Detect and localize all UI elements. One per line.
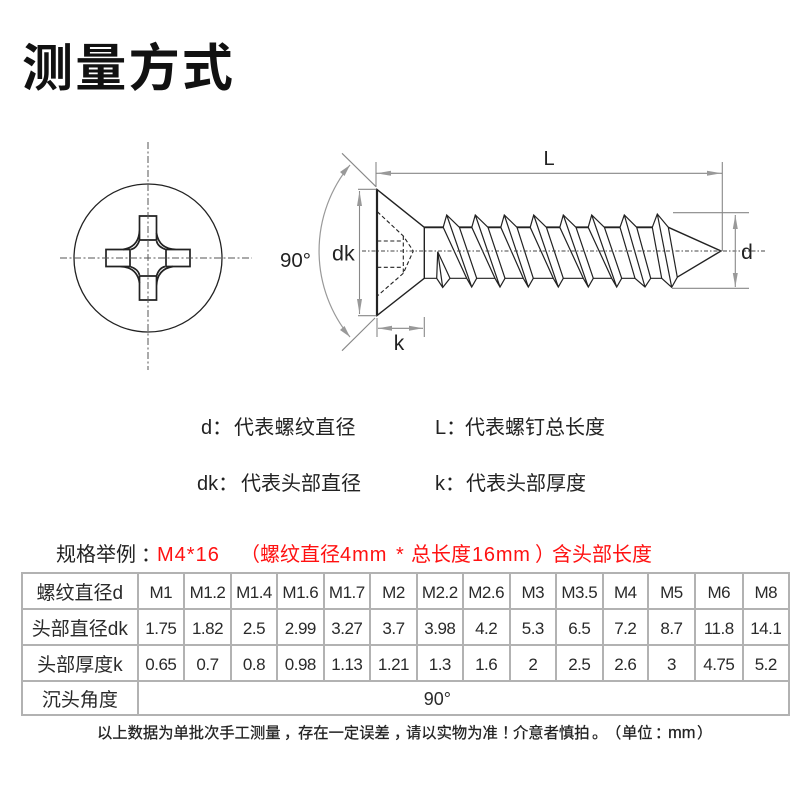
footnote: 存在一定误差 (298, 725, 390, 742)
specification table: M3.5 (561, 582, 597, 602)
specification table: M1 (150, 582, 172, 602)
specification table: M1.4 (236, 582, 272, 602)
specification example: M4*16 (157, 544, 220, 566)
specification table: 4.2 (475, 618, 497, 638)
specification table: 0.7 (196, 654, 219, 674)
specification example: * (396, 544, 404, 566)
specification table: M2.6 (468, 582, 504, 602)
specification table: 2.5 (568, 654, 590, 674)
specification table (21, 572, 790, 716)
specification table: 2.6 (614, 654, 636, 674)
specification table: 2.5 (243, 618, 265, 638)
specification table: 7.2 (614, 618, 636, 638)
specification example: 含头部长度 (552, 544, 652, 566)
specification table: M2 (382, 582, 405, 602)
specification example: ） (535, 544, 555, 566)
specification table: 0.65 (145, 654, 176, 674)
specification table: 11.8 (704, 618, 734, 638)
footnote: mm (668, 724, 696, 742)
specification table: 5.3 (522, 618, 544, 638)
specification table: M1.2 (190, 582, 225, 602)
footnote: ） (697, 725, 712, 742)
dimension 90 degree angle: 90° (280, 249, 311, 272)
footnote: 请以实物为准 (406, 725, 498, 742)
specification table: 2.99 (285, 618, 316, 638)
footnote (97, 724, 712, 742)
dimension dk (332, 189, 376, 316)
legend: d: d： (201, 417, 232, 439)
footnote: （ (606, 725, 621, 742)
specification table: 0.8 (243, 654, 265, 674)
specification example: 规格举例 (56, 544, 136, 566)
side view of screw (377, 190, 721, 316)
legend: L: L： (435, 417, 466, 439)
legend: dk: dk： (197, 473, 238, 495)
specification table: 14.1 (750, 618, 781, 638)
specification example: ： (141, 544, 161, 566)
dimension dk: dk (332, 242, 355, 266)
footnote: ， (394, 725, 409, 742)
specification table: 1.21 (378, 654, 409, 674)
legend: k: 代表头部厚度 (466, 473, 586, 495)
dimension L: L (543, 148, 555, 170)
legend: L: 代表螺钉总长度 (465, 417, 605, 439)
specification table: M1.6 (282, 582, 318, 602)
specification table: M2.2 (422, 582, 458, 602)
legend: d: 代表螺纹直径 (234, 417, 356, 439)
specification table: 3.98 (424, 618, 455, 638)
specification table: 0.98 (285, 654, 316, 674)
specification table: M8 (754, 582, 777, 602)
specification example: 16mm (472, 544, 531, 566)
specification table: 8.7 (660, 618, 682, 638)
dimension L (376, 148, 722, 251)
specification table: 6.5 (568, 618, 590, 638)
specification table: 2 (528, 654, 537, 674)
footnote: 以上数据为单批次手工测量 (97, 725, 281, 742)
title: 测量方式 (22, 40, 235, 97)
specification table: 5.2 (755, 654, 777, 674)
top view of screw head (60, 142, 252, 370)
specification table: 头部厚度k (37, 654, 123, 676)
specification table: 1.13 (331, 654, 362, 674)
specification table: 1.6 (475, 654, 497, 674)
dimension k (377, 317, 424, 355)
specification table: 3 (667, 654, 676, 674)
specification table: 4.75 (703, 654, 734, 674)
dimension k: k (394, 332, 405, 355)
specification table: 螺纹直径d (37, 582, 123, 604)
specification table: 头部直径dk (32, 618, 128, 640)
specification table: M6 (707, 582, 730, 602)
footnote: ： (655, 725, 670, 742)
dimension d (672, 213, 753, 288)
legend: dk: 代表头部直径 (241, 473, 361, 495)
specification table: 3.27 (331, 618, 362, 638)
specification table: 90° (424, 688, 451, 708)
specification example: 总长度 (411, 544, 471, 566)
footnote: ！ (502, 725, 517, 742)
specification table: M1.7 (329, 582, 365, 602)
specification example: 4mm (340, 544, 387, 566)
specification table: M3 (521, 582, 544, 602)
specification table: 沉头角度 (42, 690, 118, 710)
footnote: 单位 (622, 725, 653, 742)
legend: k: k： (435, 473, 465, 495)
dimension d: d (741, 241, 753, 264)
specification table: 1.82 (192, 618, 223, 638)
specification table: 3.7 (382, 618, 405, 638)
dimension 90 degree angle (280, 153, 376, 351)
specification example (56, 544, 652, 566)
footnote: 介意者慎拍 (513, 725, 590, 742)
specification table: M5 (660, 582, 683, 602)
footnote: 。 (592, 725, 607, 742)
specification table: M4 (614, 582, 637, 602)
specification table: 1.75 (145, 618, 176, 638)
specification table: 1.3 (429, 654, 451, 674)
specification example: （螺纹直径 (240, 544, 340, 566)
center line (362, 250, 767, 252)
footnote: ， (284, 725, 299, 742)
